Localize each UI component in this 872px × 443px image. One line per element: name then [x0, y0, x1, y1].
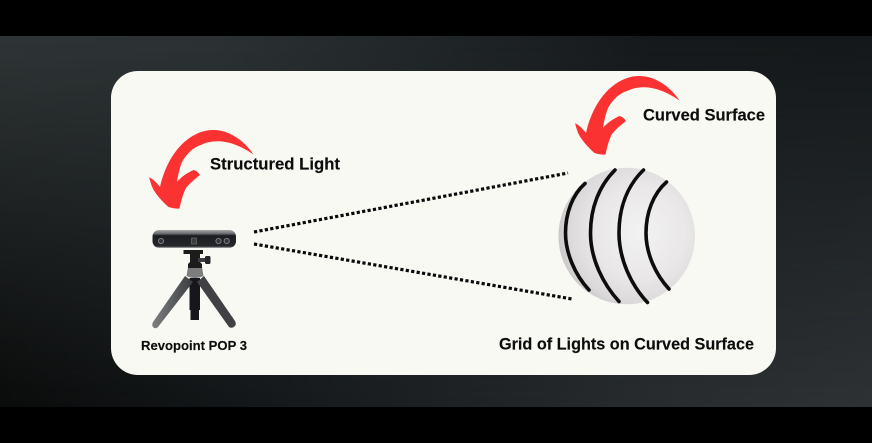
- panel: white card: [111, 71, 776, 375]
- scanner body: [152, 230, 236, 248]
- tripod left leg: [152, 276, 193, 328]
- label: Revopoint POP 3: Revopoint POP 3: [141, 338, 247, 353]
- icon: Revopoint POP 3 scanner on tripod: [152, 230, 236, 328]
- ball head mount: [184, 250, 203, 268]
- mount knob: [198, 258, 207, 262]
- stripes: [566, 170, 669, 302]
- sphere with projected light stripes: [558, 168, 695, 304]
- heading: Structured Light: Structured Light: [210, 156, 341, 174]
- tripod right leg: [197, 276, 236, 328]
- scanner lenses: [158, 238, 229, 244]
- tripod collar: [186, 267, 204, 278]
- icon: red curved arrow to scanner: [149, 130, 254, 209]
- caption: Grid of Lights on Curved Surface: Grid of Lights on Curved Surface: [499, 334, 754, 354]
- dotted line: upper light beam: [254, 173, 568, 232]
- heading: Curved Surface: Curved Surface: [643, 106, 765, 124]
- icon: red curved arrow to sphere: [575, 76, 680, 155]
- sphere: [558, 168, 695, 304]
- dotted line: lower light beam: [254, 244, 572, 299]
- tripod centre leg: [190, 278, 200, 320]
